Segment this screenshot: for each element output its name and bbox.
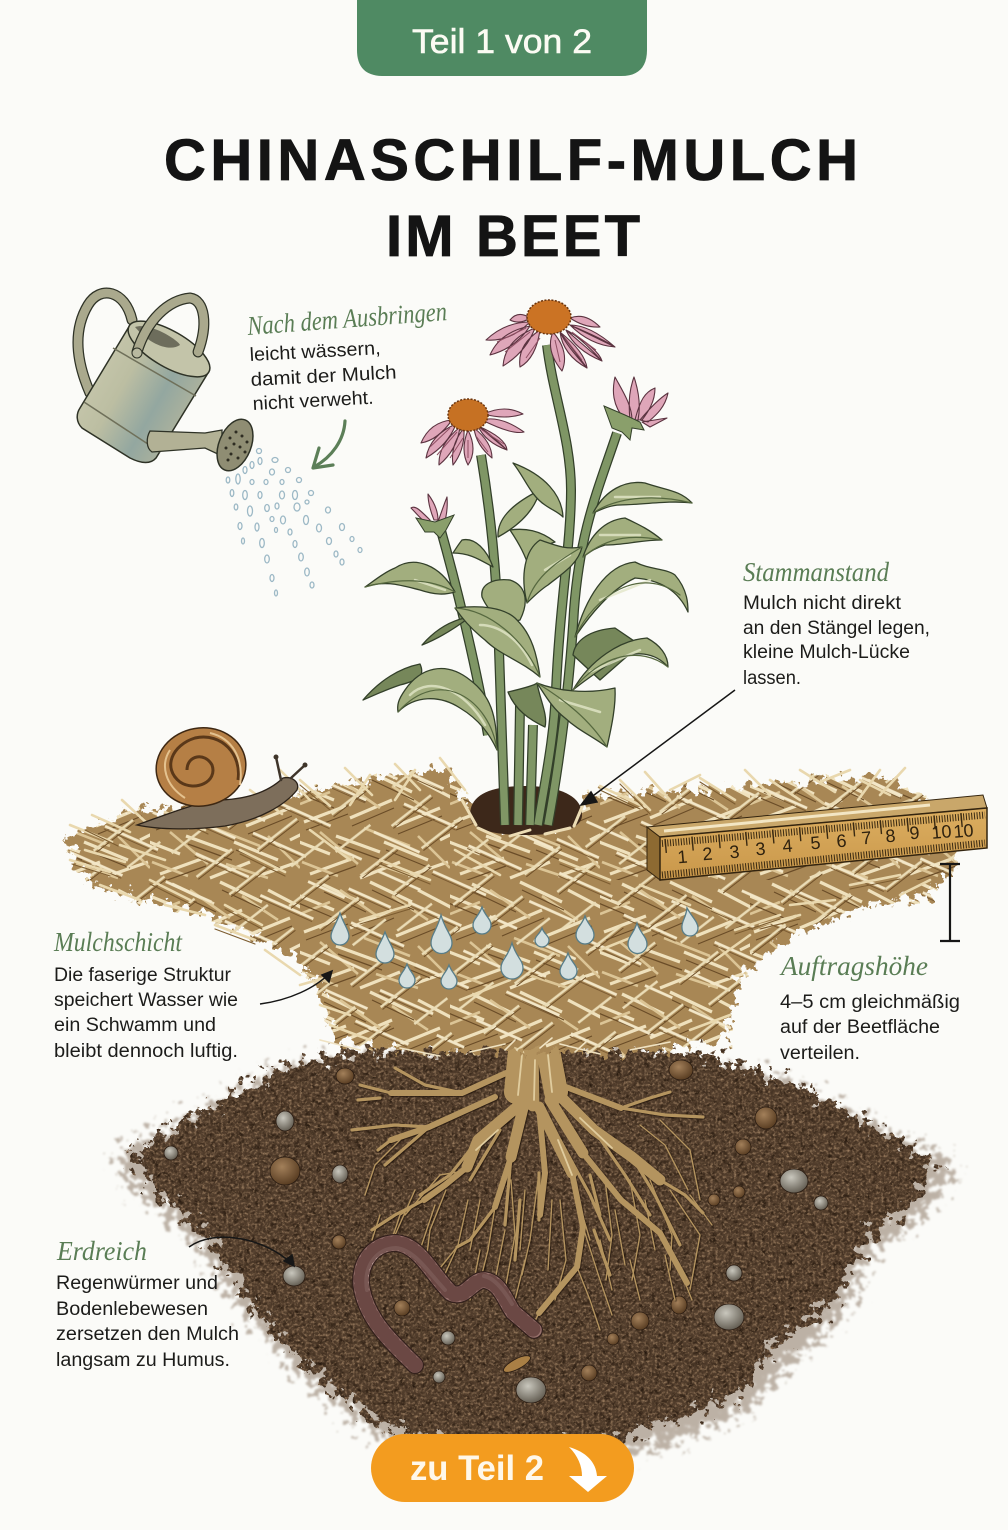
title: IM BEET [386, 204, 640, 269]
title: CHINASCHILF-MULCH [164, 128, 858, 193]
mulch layer [62, 756, 958, 1061]
arrow: Erdreich [189, 1237, 294, 1266]
folding ruler [647, 795, 987, 880]
water spray [226, 448, 362, 596]
planting gap in mulch [470, 786, 582, 835]
flower: right bud [604, 377, 668, 440]
can body [77, 325, 208, 463]
plant: coneflower [363, 300, 692, 838]
ruler numbers [677, 820, 974, 867]
leaves [482, 580, 525, 621]
ruler numbers: 10 [931, 821, 952, 843]
can rose [210, 414, 260, 476]
callout: Erdreich: zersetzen den Mulch [56, 1324, 239, 1345]
button: zu Teil 2: zu Teil 2 [410, 1449, 544, 1488]
callout: Stammanstand: Mulch nicht direkt [743, 593, 902, 614]
callout: Stammanstand: lassen. [743, 668, 801, 689]
callout: Erdreich [56, 1236, 239, 1371]
arrow: water note to spray [313, 421, 345, 468]
callout: Nach dem Ausbringen: Nach dem Ausbringen [245, 296, 448, 341]
ruler ticks [662, 815, 985, 875]
arrow: Mulchschicht [260, 971, 332, 1004]
ruler numbers: 1 [677, 847, 688, 867]
callout: Mulchschicht: Die faserige Struktur [54, 965, 232, 986]
watering can [77, 293, 260, 476]
flower: large open bloom [486, 300, 615, 371]
callout: Auftragshöhe: 4–5 cm gleichmäßig [780, 992, 960, 1013]
ruler numbers: 10 [953, 820, 974, 842]
can spout [147, 430, 222, 456]
loose mulch straws [70, 758, 930, 1056]
callout: Erdreich: Erdreich [56, 1236, 147, 1266]
ruler numbers: 3 [755, 839, 766, 859]
title [164, 128, 858, 269]
ruler numbers: 4 [782, 836, 793, 856]
earthworm [361, 1243, 534, 1365]
flower: second open bloom [421, 399, 524, 465]
ruler numbers: 9 [909, 823, 920, 843]
snail [137, 721, 308, 829]
pebbles [164, 1060, 828, 1403]
arrow: Stammanstand to gap [581, 690, 735, 805]
callout: Auftragshöhe: verteilen. [780, 1043, 860, 1064]
water drops in mulch [331, 907, 698, 989]
callout: Mulchschicht: ein Schwamm und [54, 1015, 216, 1036]
callout: Erdreich: Regenwürmer und [56, 1273, 218, 1294]
callout: Mulchschicht [53, 927, 238, 1062]
callout: Mulchschicht: speichert Wasser wie [54, 990, 238, 1011]
callout: Erdreich: langsam zu Humus. [56, 1350, 230, 1371]
ruler numbers: 8 [885, 826, 896, 846]
flower: left bud [411, 494, 454, 538]
callout: Mulchschicht: bleibt dennoch luftig. [54, 1041, 238, 1062]
callout: Auftragshöhe [779, 951, 960, 1064]
straw overlapping plant base [462, 800, 585, 838]
can carry handle [137, 298, 204, 352]
callout: Nach dem Ausbringen: damit der Mulch [250, 362, 397, 391]
plant stems [440, 345, 617, 825]
callout: Stammanstand: Stammanstand [743, 557, 889, 587]
callout: Stammanstand [743, 557, 930, 689]
leaf highlights [410, 497, 660, 725]
callout: Mulchschicht: Mulchschicht [53, 927, 183, 957]
ruler numbers: 3 [729, 842, 740, 862]
ruler numbers: 2 [702, 844, 713, 864]
can handles [78, 293, 132, 393]
callout: Stammanstand: kleine Mulch-Lücke [743, 642, 910, 663]
plant roots [352, 1050, 712, 1335]
ruler numbers: 5 [810, 833, 821, 853]
callout: Stammanstand: an den Stängel legen, [743, 618, 930, 639]
icon: curved down arrow [569, 1447, 607, 1492]
header tab: Teil 1 von 2 [357, 0, 647, 76]
ruler numbers: 6 [836, 831, 847, 851]
callout: Erdreich: Bodenlebewesen [56, 1299, 208, 1320]
soil cross-section [115, 1046, 955, 1465]
callout: Auftragshöhe: Auftragshöhe [779, 951, 928, 981]
callout: Auftragshöhe: auf der Beetfläche [780, 1017, 940, 1038]
header tab: Teil 1 von 2: Teil 1 von 2 [412, 23, 592, 61]
button: zu Teil 2 [371, 1434, 634, 1502]
height bracket [940, 864, 960, 941]
callout: Nach dem Ausbringen [245, 296, 448, 415]
ruler numbers: 7 [861, 828, 872, 848]
callout: Nach dem Ausbringen: nicht verweht. [252, 388, 374, 415]
callout: Nach dem Ausbringen: leicht wässern, [249, 338, 381, 366]
